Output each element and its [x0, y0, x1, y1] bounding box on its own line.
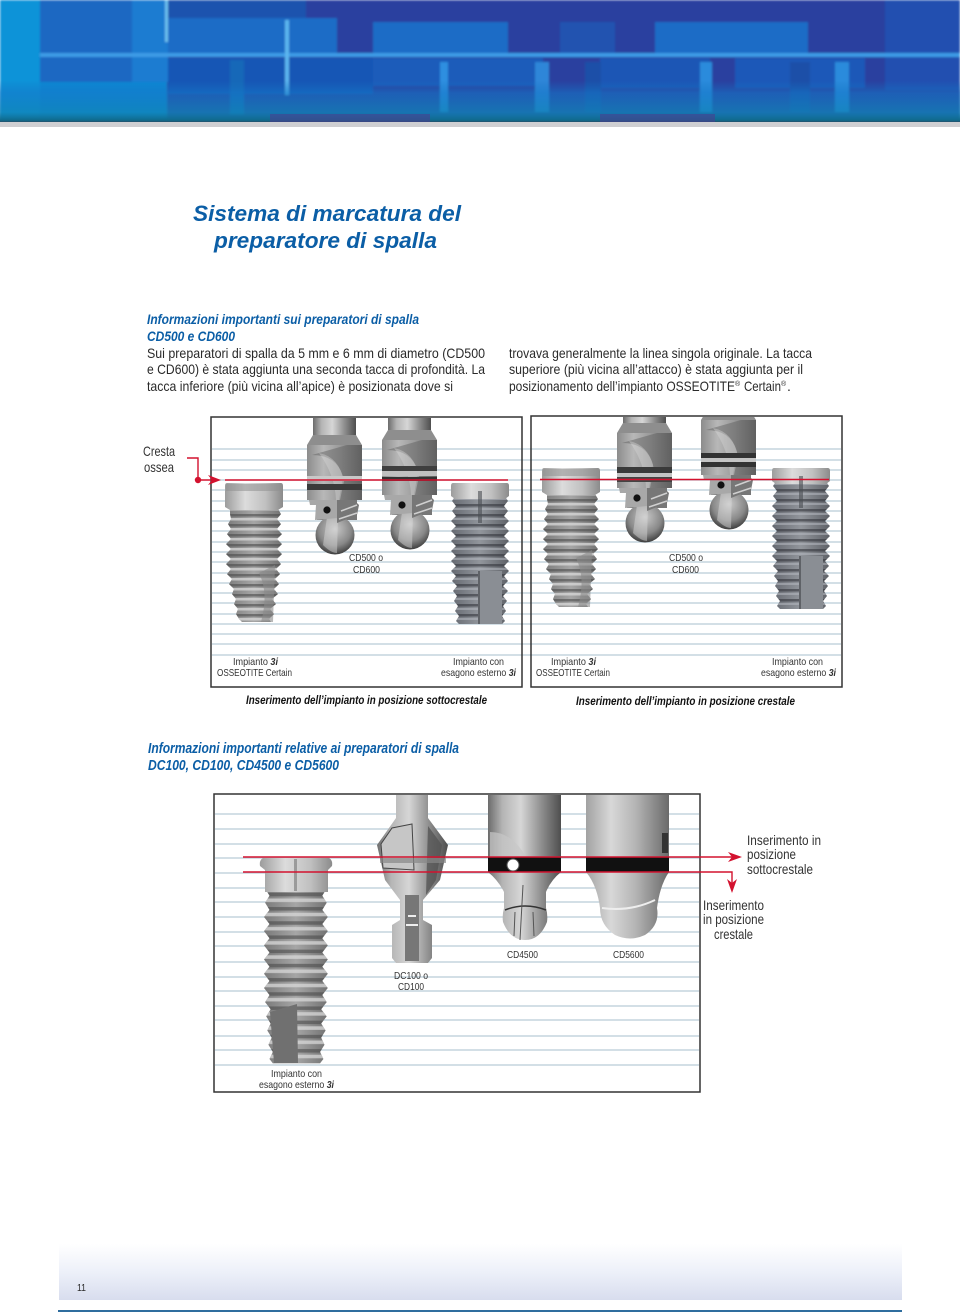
label: Impianto 3i OSSEOTITE Certain: Impianto 3i	[233, 656, 279, 668]
caption: crestal: Inserimento dell’impianto in posizione crestale	[576, 696, 796, 708]
arrow: crestal level	[243, 872, 737, 893]
red line: bone crest level	[225, 479, 508, 481]
label: Inserimento in posizione sottocrestale: posizione	[747, 846, 796, 862]
label: drill CD500 o CD600: CD600	[672, 564, 699, 576]
caption: subcrestal: Inserimento dell’impianto in posizione sottocrestale	[246, 695, 488, 707]
title: preparatore di spalla	[213, 228, 437, 253]
text block: right column: Certain	[744, 378, 781, 394]
label: Cresta ossea	[143, 443, 175, 475]
label: Inserimento in posizione crestale	[703, 897, 764, 942]
text block: right column	[509, 345, 812, 394]
label: Impianto 3i OSSEOTITE Certain	[217, 656, 292, 679]
panels top: shared background with ruled lines	[211, 416, 842, 687]
red line: bone crest level	[540, 478, 829, 480]
implant: external hex	[260, 858, 332, 1063]
text block: right column: .	[787, 378, 791, 394]
implant: external hex	[772, 468, 830, 609]
drill: CD500 subcrestal	[307, 418, 362, 554]
header grey shadow bar	[0, 122, 960, 127]
heading: DC100, CD100, CD4500 e CD5600: Informazioni importanti relative ai preparatori di spalla	[148, 741, 459, 757]
arrow: bone crest pointer	[187, 458, 221, 485]
label: Impianto con esagono esterno 3i: Impianto con	[772, 656, 823, 668]
label: CD5600: CD5600	[613, 949, 644, 961]
label: Inserimento in posizione crestale: in posizione	[703, 911, 764, 927]
label: CD4500: CD4500	[507, 949, 538, 961]
label: Impianto con esagono esterno 3i	[441, 656, 517, 679]
label: drill CD500 o CD600: CD600	[353, 564, 380, 576]
page number: 11	[77, 1283, 86, 1294]
implant: OSSEOTITE Certain	[542, 468, 600, 607]
text block: left column	[147, 345, 485, 394]
heading: CD500 e CD600	[147, 311, 419, 344]
title	[193, 201, 462, 253]
implant: OSSEOTITE Certain	[225, 483, 283, 622]
label: DC100 o CD100	[394, 970, 428, 993]
label: DC100 o CD100: CD100	[398, 981, 424, 993]
title: Sistema di marcatura del	[193, 201, 462, 226]
label: Impianto con esagono esterno 3i: esagono esterno 3i	[761, 667, 837, 679]
label: Impianto con esagono esterno 3i: Impianto con	[453, 656, 504, 668]
label: drill CD500 o CD600: CD500 o	[669, 552, 703, 564]
drill: CD5600	[586, 795, 669, 938]
label: drill CD500 o CD600: CD500 o	[349, 552, 383, 564]
heading: CD500 e CD600: Informazioni importanti sui preparatori di spalla	[147, 311, 419, 327]
heading: CD500 e CD600: CD500 e CD600	[147, 328, 235, 344]
text block: right column: ®	[735, 380, 741, 388]
label: DC100 o CD100: DC100 o	[394, 970, 428, 982]
label: Impianto con esagono esterno 3i	[259, 1068, 335, 1091]
text block: left column: tacca inferiore (più vicina all’apice) è posizionata dove si	[147, 378, 453, 394]
label: Impianto 3i OSSEOTITE Certain: OSSEOTITE Certain	[217, 667, 292, 679]
arrow: subcrestal level	[243, 852, 742, 862]
label: Impianto 3i OSSEOTITE Certain: Impianto 3i	[551, 656, 597, 668]
panel: DC100, CD100, CD4500, CD5600 drills	[214, 794, 700, 1092]
label: Impianto con esagono esterno 3i: Impianto con	[271, 1068, 322, 1080]
label: Inserimento in posizione crestale: Inserimento	[703, 897, 764, 913]
label: Impianto 3i OSSEOTITE Certain	[536, 656, 610, 679]
label: Inserimento in posizione sottocrestale: Inserimento in	[747, 832, 821, 848]
label: Impianto con esagono esterno 3i	[761, 656, 837, 679]
text block: right column: posizionamento dell’impianto OSSEOTITE	[509, 378, 735, 394]
text block: right column: trovava generalmente la linea singola originale. La tacca	[509, 345, 812, 361]
drill: CD4500	[488, 795, 561, 940]
label: drill CD500 o CD600	[669, 552, 703, 576]
drill: CD600 subcrestal	[382, 418, 437, 550]
heading: DC100, CD100, CD4500 e CD5600	[148, 741, 459, 774]
drill: CD600 crestal	[701, 417, 756, 530]
label: Inserimento in posizione crestale: crestale	[714, 926, 753, 942]
text block: left column: Sui preparatori di spalla da 5 mm e 6 mm di diametro (CD500	[147, 345, 485, 361]
heading: DC100, CD100, CD4500 e CD5600: DC100, CD100, CD4500 e CD5600	[148, 758, 339, 774]
header banner	[0, 0, 960, 122]
label: Inserimento in posizione sottocrestale	[747, 832, 821, 877]
label: Impianto 3i OSSEOTITE Certain: OSSEOTITE Certain	[536, 667, 610, 679]
panel: crestal placement	[530, 415, 843, 688]
label: Cresta ossea: ossea	[144, 459, 174, 475]
panel: subcrestal placement	[210, 416, 523, 688]
label: Impianto con esagono esterno 3i: esagono esterno 3i	[259, 1079, 335, 1091]
text block: left column: e CD600) è stata aggiunta una seconda tacca di profondità. La	[147, 361, 485, 377]
implant: external hex	[451, 483, 509, 624]
drill: CD500 crestal	[617, 417, 672, 542]
drill: DC100 o CD100	[377, 795, 448, 963]
text block: right column: superiore (più vicina all’attacco) è stata aggiunta per il	[509, 361, 803, 377]
footer band	[58, 1244, 902, 1312]
label: drill CD500 o CD600	[349, 552, 383, 576]
label: Inserimento in posizione sottocrestale: sottocrestale	[747, 861, 813, 877]
text block: right column: ®	[781, 380, 787, 388]
label: Cresta ossea: Cresta	[143, 443, 175, 459]
label: Impianto con esagono esterno 3i: esagono esterno 3i	[441, 667, 517, 679]
